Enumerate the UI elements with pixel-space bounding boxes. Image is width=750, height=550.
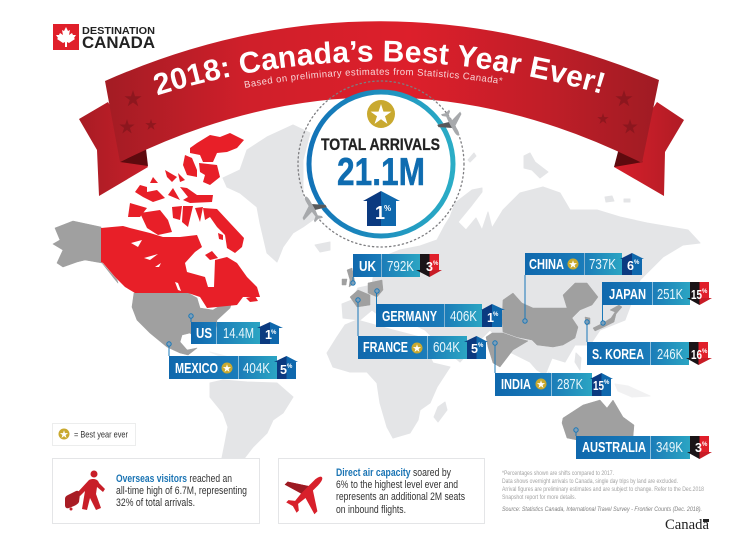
logo wordmark — [82, 25, 155, 52]
label: France: 604K — [433, 339, 460, 356]
label: India: INDIA — [501, 376, 531, 393]
icon: gold star medal — [367, 100, 395, 128]
label: Mexico: % — [287, 364, 293, 370]
panel: direct air capacity — [277, 458, 484, 524]
label: France: % — [478, 343, 484, 349]
map: highlighted countries — [342, 268, 634, 457]
label: Japan — [601, 282, 712, 325]
direct air capacity text: represents an additional 2M seats — [336, 491, 465, 503]
direct air capacity text: Direct air capacity soared by — [336, 467, 451, 479]
title banner — [79, 21, 684, 196]
icon: plane top right — [434, 105, 470, 142]
map: Canadian lakes — [131, 240, 181, 291]
label: US — [189, 314, 283, 344]
label: China: % — [634, 260, 640, 266]
label: S. Korea — [585, 320, 712, 365]
footnote: *Percentages shown are shifts compared to 2017. — [502, 470, 614, 477]
overseas visitors text: all-time high of 6.7M, representing — [116, 485, 247, 497]
Canada wordmark: Canada — [665, 517, 709, 533]
label: S. Korea: S. KOREA — [592, 346, 644, 363]
footnote: Snapshot report for more details. — [502, 494, 576, 501]
label: Australia: 349K — [656, 439, 683, 456]
label: France — [356, 298, 488, 359]
label: India: 287K — [557, 376, 583, 393]
label: Japan: JAPAN — [609, 286, 646, 303]
label: Germany: 1 — [487, 311, 494, 325]
footnote: Data shows overnight arrivals to Canada, single day trips by land are excluded. — [502, 478, 678, 485]
label: UK: 792K — [387, 258, 414, 275]
label: Germany: GERMANY — [382, 308, 437, 325]
label: India: 15 — [593, 379, 604, 393]
banner main ribbon — [105, 21, 659, 163]
map: rest of world — [210, 125, 700, 480]
label: UK: 3 — [426, 260, 433, 274]
label: Germany: % — [493, 312, 499, 318]
icon: plane bottom left — [294, 190, 330, 227]
label: Mexico: 5 — [280, 363, 287, 377]
banner title: 2018: Canada’s Best Year Ever! — [154, 40, 605, 96]
label: India: % — [604, 380, 610, 386]
banner right fold — [614, 148, 643, 167]
label: Germany: 406K — [450, 308, 477, 325]
logo wordmark: DESTINATION — [82, 25, 155, 37]
logo flag — [53, 24, 79, 50]
label: France: FRANCE — [363, 339, 408, 356]
label: Australia: 3 — [695, 441, 702, 455]
map: United States and Mexico — [53, 221, 233, 355]
total arrivals circle — [298, 81, 464, 247]
label: Australia: AUSTRALIA — [582, 439, 646, 456]
label: Japan: % — [702, 289, 708, 295]
icon: red plane — [277, 462, 337, 522]
panel: overseas visitors — [52, 458, 260, 524]
up arrow 1%: % — [384, 204, 391, 213]
legend: best year ever — [52, 424, 136, 446]
footnote: Arrival figures are preliminary estimates and are subject to change. Refer to the Dec.2018 — [502, 486, 704, 493]
footnote: Source: Statistics Canada, International Travel Survey - Frontier Counts (Dec. 2018). — [502, 506, 702, 513]
world map — [53, 125, 700, 480]
label: China: CHINA — [529, 256, 564, 273]
label: Mexico — [167, 342, 298, 379]
label: France: 5 — [471, 342, 478, 356]
logo wordmark: CANADA — [82, 34, 155, 52]
overseas visitors text: 32% of total arrivals. — [116, 497, 195, 509]
banner left fold — [120, 149, 148, 166]
direct air capacity text — [336, 467, 465, 516]
label: UK — [351, 254, 442, 285]
label: China: 6 — [627, 259, 634, 273]
label: US: US — [196, 325, 212, 342]
banner stars — [119, 90, 638, 133]
banner subtitle: Based on preliminary estimates from Statistics Canada* — [244, 68, 502, 88]
total arrivals label: TOTAL ARRIVALS — [321, 135, 440, 154]
total arrivals value: 21.1M — [337, 151, 425, 194]
icon: traveller with suitcase — [65, 470, 105, 510]
direct air capacity text: 6% to the highest level ever and — [336, 479, 458, 491]
overseas visitors text: Overseas visitors reached an — [116, 473, 232, 485]
map: Canada — [101, 133, 260, 308]
label: UK: UK — [359, 258, 376, 275]
label: Japan: 251K — [657, 286, 683, 303]
banner right tail — [614, 102, 684, 196]
banner left tail — [79, 102, 148, 196]
label: India — [493, 341, 613, 396]
label: Mexico: MEXICO — [175, 360, 218, 377]
label: Australia — [574, 428, 712, 459]
label: Australia: % — [702, 442, 708, 448]
label: S. Korea: 16 — [691, 348, 702, 362]
label: Mexico: 404K — [243, 360, 270, 377]
up arrow 1% — [363, 191, 400, 226]
label: S. Korea: % — [702, 349, 708, 355]
logo: Destination Canada — [53, 24, 155, 52]
label: S. Korea: 246K — [657, 346, 683, 363]
overseas visitors text — [116, 473, 247, 509]
label: US: 14.4M — [223, 325, 254, 342]
direct air capacity text: on inbound flights. — [336, 504, 406, 516]
label: Germany — [375, 289, 505, 327]
label: US: 1 — [265, 328, 272, 342]
up arrow 1%: 1 — [375, 203, 385, 223]
legend: best year ever: = Best year ever — [74, 430, 128, 440]
footnote — [502, 470, 704, 513]
label: China — [523, 253, 644, 323]
label: Japan: 15 — [691, 288, 702, 302]
label: China: 737K — [589, 256, 616, 273]
label: US: % — [271, 330, 277, 336]
label: UK: % — [433, 261, 439, 267]
